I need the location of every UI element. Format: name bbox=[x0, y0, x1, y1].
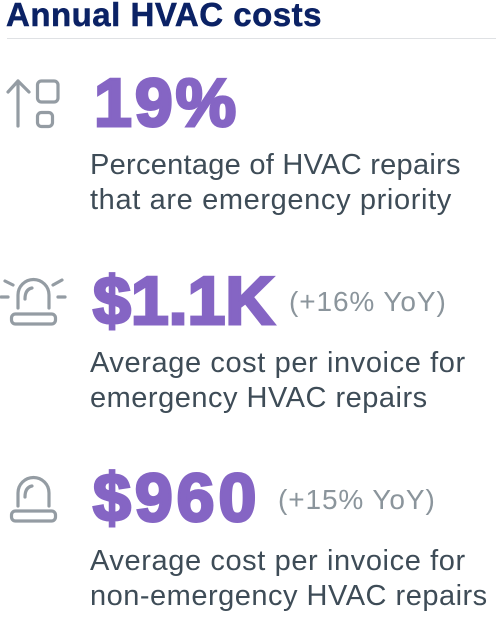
stat: 19%: 19% bbox=[94, 65, 239, 141]
change: +16% YoY: (+16% YoY) bbox=[289, 286, 447, 317]
stat: $1.1K: $1.1K bbox=[93, 263, 274, 339]
description: non-emergency cost: Average cost per invoice for bbox=[90, 545, 466, 577]
icon: alarm with rays bbox=[0, 278, 67, 326]
description: emergency priority: Percentage of HVAC repairs bbox=[90, 149, 461, 181]
description: emergency priority: that are emergency priority bbox=[90, 184, 452, 216]
description: emergency cost bbox=[90, 347, 466, 414]
description: emergency priority bbox=[90, 149, 461, 216]
description: emergency cost: emergency HVAC repairs bbox=[90, 382, 428, 414]
icon: arrow up and squares bbox=[6, 79, 60, 128]
icon: alarm bbox=[10, 476, 58, 523]
description: non-emergency cost bbox=[90, 545, 488, 612]
description: non-emergency cost: non-emergency HVAC repairs bbox=[90, 580, 488, 612]
description: emergency cost: Average cost per invoice for bbox=[90, 347, 466, 379]
change: +15% YoY: (+15% YoY) bbox=[278, 484, 436, 515]
stat: $960: $960 bbox=[93, 460, 260, 536]
